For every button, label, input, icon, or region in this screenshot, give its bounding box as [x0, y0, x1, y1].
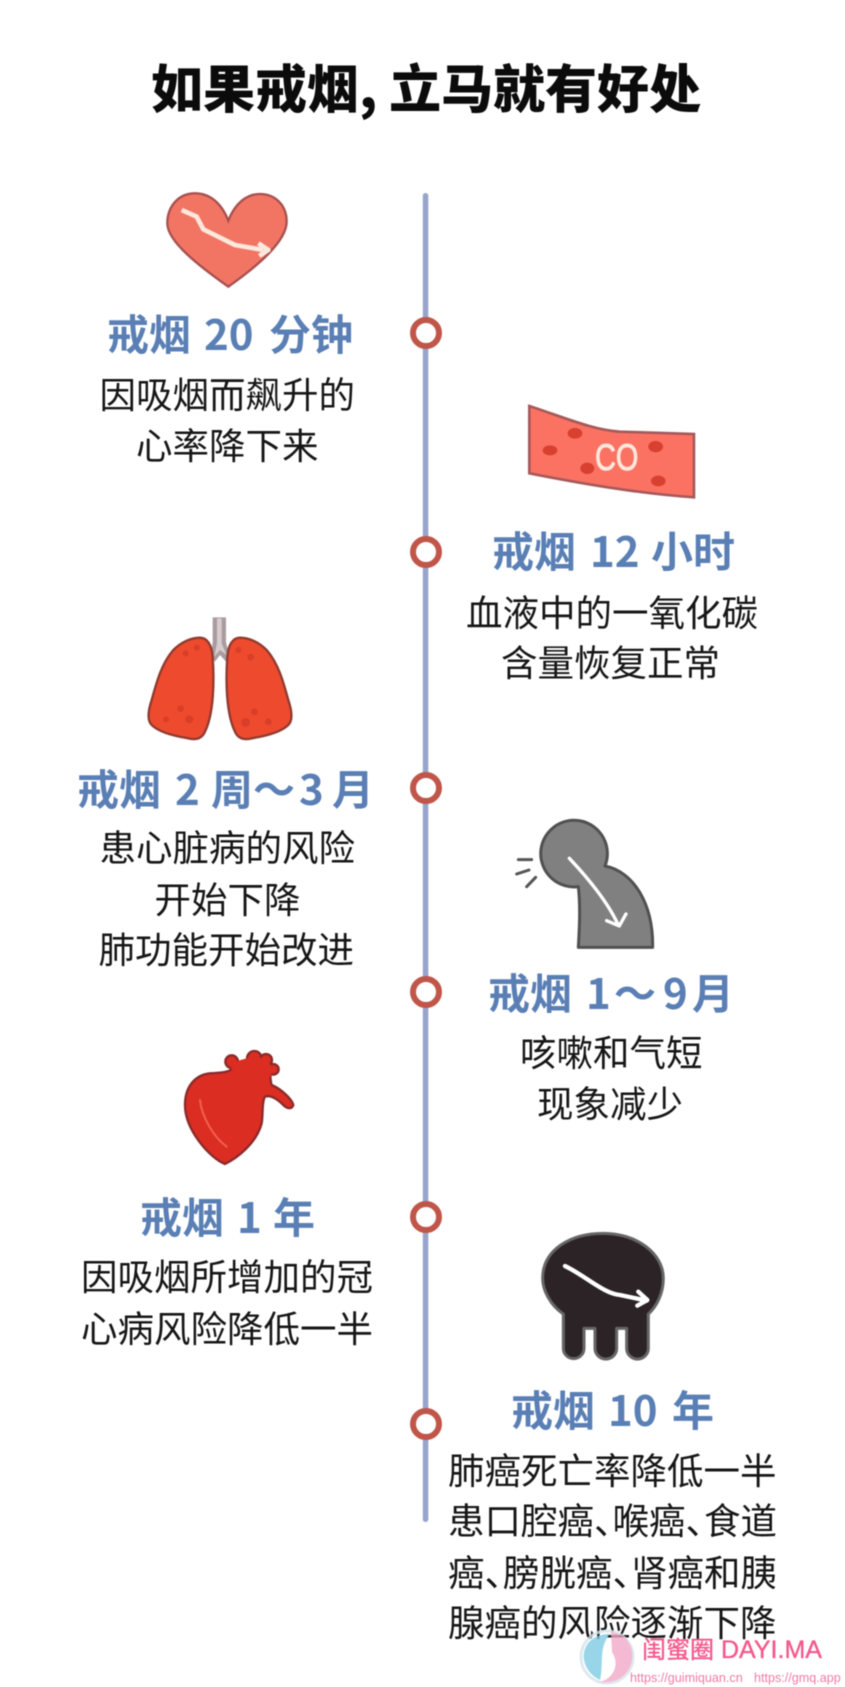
title: 如果戒烟, 立马就有好处 [151, 48, 701, 123]
heading: 20 minutes: 分钟 [269, 302, 353, 363]
text: 10 years description: 癌、膀胱癌、肾癌和胰 [448, 1544, 777, 1597]
heading: 1 to 9 months: 1 [586, 961, 611, 1022]
heading: 2 weeks to 3 months: 周 [211, 757, 253, 818]
text: 2 weeks to 3 months description: 开始下降 [154, 871, 300, 924]
heading: 1 year: 年 [273, 1185, 315, 1246]
heading: 1 to 9 months: 戒烟 [488, 961, 582, 1022]
heading: 12 hours: 小时 [651, 519, 735, 580]
panel: 20 minutes [100, 302, 355, 470]
icon: blood vessel with CO: CO [595, 437, 638, 478]
heading: 1 to 9 months: 9 [663, 961, 697, 1022]
timeline node: 10 years [413, 1411, 439, 1437]
timeline node: 1 to 9 months [413, 979, 439, 1005]
timeline node: 12 hours [413, 539, 439, 565]
text: 2 weeks to 3 months description: 肺功能开始改进 [98, 921, 354, 974]
text: 1 year description: 因吸烟所增加的冠 [81, 1248, 373, 1301]
text: 1 to 9 months description [520, 1024, 702, 1128]
heading: 20 minutes: 20 [204, 302, 263, 363]
heading: 10 years: 戒烟 [511, 1378, 605, 1439]
heading: 10 years: 10 [608, 1378, 667, 1439]
text: 12 hours description: 含量恢复正常 [501, 634, 720, 687]
text: 2 weeks to 3 months description: 患心脏病的风险 [100, 819, 355, 872]
watermark urls: https://gmq.app [754, 1671, 841, 1685]
icon: lungs [149, 617, 291, 739]
text: 10 years description: 腺癌的风险逐渐下降 [448, 1594, 776, 1647]
text: 10 years description: 肺癌死亡率降低一半 [448, 1442, 776, 1495]
heading: 12 hours: 12 [590, 519, 649, 580]
heading: 2 weeks to 3 months: 3 [299, 757, 333, 818]
watermark brand: DAYI.MA [721, 1636, 822, 1664]
heading: 20 minutes: 戒烟 [107, 302, 201, 363]
watermark brand [642, 1630, 822, 1665]
heading: 12 hours: 戒烟 [492, 519, 586, 580]
watermark [581, 1630, 841, 1685]
watermark brand: 闺蜜圈 [642, 1630, 714, 1665]
heading: 10 years: 年 [672, 1378, 714, 1439]
heading: 1 to 9 months: 月 [692, 961, 734, 1022]
icon: coughing person [517, 820, 653, 947]
text: 12 hours description [466, 584, 758, 687]
heading: 2 weeks to 3 months: ～ [253, 757, 295, 818]
text: 1 year description [81, 1248, 373, 1353]
panel: 10 years [448, 1378, 777, 1647]
text: 1 to 9 months description: 咳嗽和气短 [520, 1024, 702, 1077]
text: 10 years description [448, 1442, 777, 1647]
text: 2 weeks to 3 months description [98, 819, 355, 974]
heading: 2 weeks to 3 months: 2 [175, 757, 209, 818]
timeline [413, 193, 439, 1522]
timeline node: 2 weeks to 3 months [413, 775, 439, 801]
panel: 12 hours [466, 519, 758, 687]
text: 12 hours description: 血液中的一氧化碳 [466, 584, 758, 637]
text: 1 to 9 months description: 现象减少 [537, 1075, 683, 1128]
icon: black lung with falling arrow [543, 1233, 663, 1359]
timeline node: 20 minutes [413, 320, 439, 346]
text: 10 years description: 患口腔癌、喉癌、食道 [448, 1492, 777, 1545]
heading: 1 year: 1 [237, 1185, 271, 1246]
icon: blood vessel with CO [529, 406, 694, 497]
heading: 2 weeks to 3 months: 戒烟 [77, 757, 171, 818]
text: 20 minutes description: 心率降下来 [136, 417, 318, 470]
text: 1 year description: 心病风险降低一半 [81, 1300, 373, 1353]
watermark urls [630, 1671, 841, 1685]
panel: 1 year [81, 1185, 373, 1353]
icon: heart with falling arrow [167, 193, 287, 287]
watermark urls: https://guimiquan.cn [630, 1671, 743, 1685]
heading: 1 year: 戒烟 [140, 1185, 234, 1246]
timeline node: 1 year [413, 1204, 439, 1230]
icon: watermark logo [581, 1631, 633, 1683]
heading: 1 to 9 months: ～ [614, 961, 656, 1022]
heading: 2 weeks to 3 months: 月 [332, 757, 374, 818]
panel: 1 to 9 months [488, 961, 734, 1128]
text: 20 minutes description [100, 366, 355, 470]
panel: 2 weeks to 3 months [77, 757, 374, 974]
text: 20 minutes description: 因吸烟而飙升的 [100, 366, 355, 419]
icon: anatomical heart [185, 1051, 293, 1164]
